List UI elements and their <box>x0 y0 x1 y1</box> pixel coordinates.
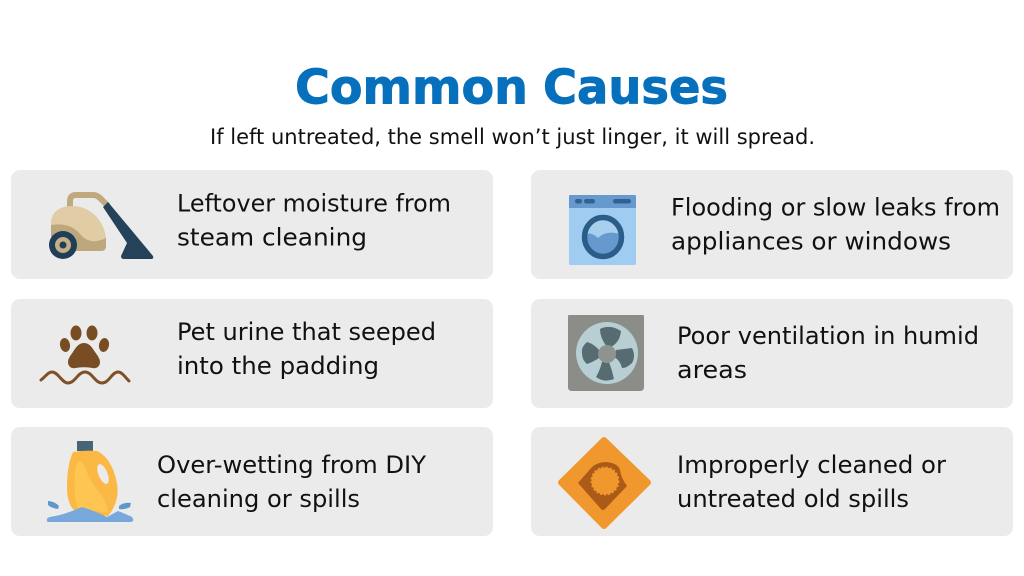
subtitle: If left untreated, the smell won’t just linger, it will spread. <box>210 125 815 150</box>
text: ventilation: areas <box>677 356 747 384</box>
text: pet urine <box>177 318 436 380</box>
panel: pet urine <box>11 299 493 408</box>
text: leftover moisture: steam cleaning <box>177 224 367 252</box>
panel: old spills <box>531 427 1013 536</box>
text: flooding: appliances or windows <box>671 228 951 256</box>
text: old spills: untreated old spills <box>677 485 909 513</box>
text: over-wetting <box>157 451 426 513</box>
text: leftover moisture <box>177 190 451 252</box>
panel: over-wetting <box>11 427 493 536</box>
panel: steam cleaning moisture <box>11 170 493 279</box>
icon: carpet steam cleaner <box>49 195 153 259</box>
title <box>295 60 728 116</box>
icon: washing machine <box>569 195 636 265</box>
icon: stain on diamond <box>561 440 648 526</box>
panel: poor ventilation <box>531 299 1013 408</box>
title: Common <box>295 60 528 116</box>
text: flooding: Flooding or slow leaks from <box>671 194 1000 222</box>
text: ventilation <box>677 322 979 384</box>
text: leftover moisture: Leftover moisture from <box>177 190 451 218</box>
text: pet urine: into the padding <box>177 352 379 380</box>
text: ventilation: Poor ventilation in humid <box>677 322 979 350</box>
text: over-wetting: cleaning or spills <box>157 485 360 513</box>
icon: ventilation fan <box>568 315 644 391</box>
text: flooding <box>671 194 1000 256</box>
panel: flooding or leaks <box>531 170 1013 279</box>
title: Causes <box>543 60 728 116</box>
icon: paw print and wave <box>41 326 129 383</box>
text: pet urine: Pet urine that seeped <box>177 318 436 346</box>
text: over-wetting: Over-wetting from DIY <box>157 451 426 479</box>
icon: detergent bottle in water <box>47 441 133 522</box>
text: old spills <box>677 451 946 513</box>
text: old spills: Improperly cleaned or <box>677 451 946 479</box>
